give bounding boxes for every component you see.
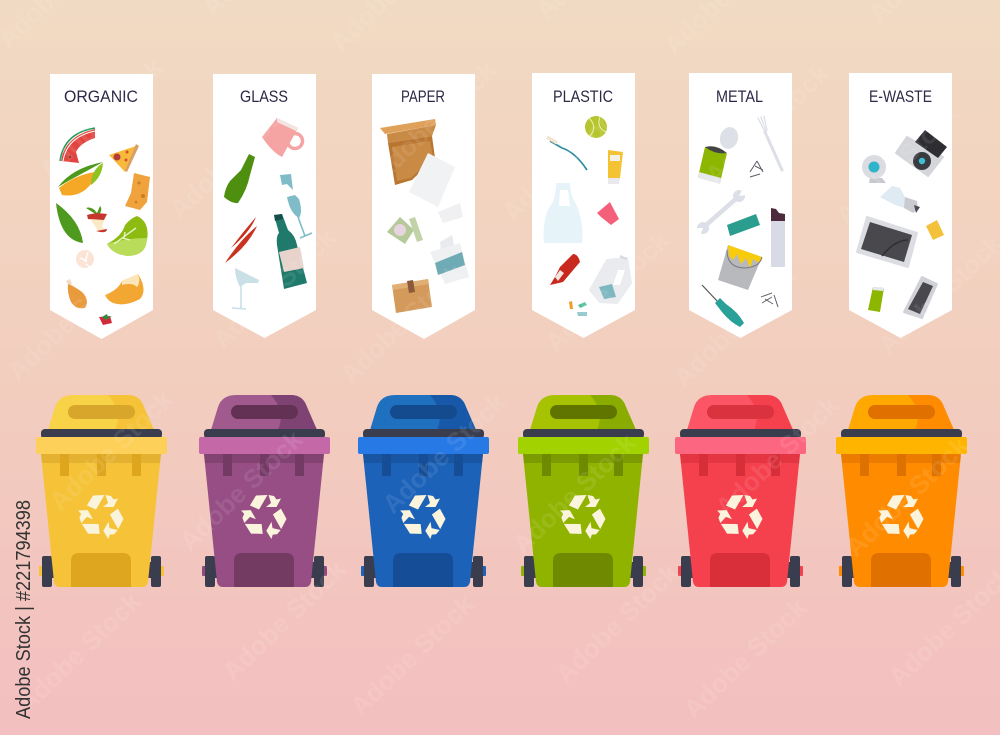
- icon: lettuce: [107, 216, 148, 256]
- icon: plastic bag: [544, 183, 582, 243]
- icon: milk jug: [590, 255, 631, 303]
- bin: e-waste orange: [836, 395, 967, 587]
- bin: paper blue: [358, 395, 489, 587]
- icon: chicken leg: [66, 279, 87, 308]
- icon: steel beam: [727, 214, 760, 236]
- bin: metal red: [675, 395, 806, 587]
- icon: yellow battery: [926, 220, 944, 240]
- icon: wrench: [697, 188, 746, 236]
- panel: e-waste: [849, 73, 952, 338]
- icon: green bottle: [224, 154, 255, 203]
- icon: smartphone: [904, 277, 937, 318]
- icon: egg shell: [76, 250, 94, 268]
- watermarks: Adobe Stock: [1, 254, 137, 386]
- panel: metal: [689, 73, 792, 338]
- icon: cd sleeve: [387, 217, 423, 244]
- icon: parcel: [392, 279, 432, 313]
- panel: plastic: [532, 73, 635, 338]
- watermarks: Adobe Stock: [677, 592, 813, 724]
- icon: green battery: [868, 287, 884, 312]
- icon: tin can: [698, 146, 727, 184]
- icon: open cardboard box: [380, 119, 436, 185]
- panel: glass: [213, 74, 316, 338]
- watermarks: Adobe Stock: [43, 384, 179, 516]
- watermarks: Adobe Stock: [496, 95, 632, 227]
- icon: tennis ball: [585, 116, 607, 138]
- bin: plastic green: [518, 395, 649, 587]
- heading: e-waste: E-WASTE: [869, 87, 932, 106]
- watermarks: Adobe Stock: [206, 222, 342, 354]
- icon: nails: [750, 161, 763, 177]
- icon: fork: [758, 116, 782, 170]
- icon: ketchup bottle: [550, 254, 580, 285]
- icon: tablet: [857, 217, 917, 267]
- watermarks: Adobe Stock: [173, 424, 309, 556]
- icon: watermelon: [60, 128, 95, 163]
- watermarks: Adobe Stock: [11, 586, 147, 718]
- icon: wine bottle: [274, 214, 307, 289]
- icon: screwdriver: [702, 285, 744, 327]
- icon: wine glass: [287, 195, 312, 238]
- icon: milk carton: [430, 235, 469, 284]
- icon: lighter: [771, 208, 785, 267]
- watermarks: Adobe Stock: [539, 225, 675, 357]
- watermarks: Adobe Stock: [334, 257, 470, 389]
- bin: glass purple: [199, 395, 330, 587]
- icon: tube: [608, 150, 623, 184]
- icon: webcam: [862, 155, 886, 183]
- icon: envelope: [438, 203, 463, 223]
- watermarks: Adobe Stock: [344, 589, 480, 721]
- watermarks: Adobe Stock: [366, 55, 502, 187]
- icon: paint bucket: [718, 245, 762, 290]
- icon: red shards: [225, 217, 257, 263]
- panel: paper: [372, 74, 475, 339]
- watermarks: Adobe Stock: [829, 98, 965, 230]
- watermarks: Adobe Stock: [699, 58, 835, 190]
- icon: cup: [597, 202, 619, 225]
- panel: organic: [50, 74, 153, 339]
- icon: nails two: [761, 293, 778, 307]
- icon: paper sheet: [409, 153, 455, 207]
- icon: martini glass: [232, 268, 259, 309]
- watermarks: Adobe Stock: [839, 430, 975, 562]
- heading: glass: GLASS: [240, 87, 288, 106]
- heading: organic: ORGANIC: [64, 87, 138, 106]
- watermarks: Adobe Stock: [163, 92, 299, 224]
- icon: bean leaf: [56, 203, 83, 243]
- stock id caption: Adobe Stock | #221794398: [13, 500, 35, 719]
- icon: apple core: [86, 206, 107, 232]
- watermarks: Adobe Stock: [216, 554, 352, 686]
- heading: paper: PAPER: [401, 87, 445, 106]
- icon: camera: [896, 130, 947, 176]
- icon: can lid: [717, 125, 741, 151]
- icon: corn: [58, 162, 103, 196]
- icon: mug: [262, 118, 302, 157]
- icon: toothbrush: [547, 137, 587, 170]
- heading: metal: METAL: [716, 87, 763, 106]
- watermarks: Adobe Stock: [667, 260, 803, 392]
- icon: glass shard: [280, 174, 293, 190]
- watermarks: Adobe Stock: [376, 387, 512, 519]
- watermarks: Adobe Stock: [709, 390, 845, 522]
- watermarks: Adobe Stock: [506, 427, 642, 559]
- icon: pizza: [109, 144, 139, 172]
- watermarks: Adobe Stock: [33, 52, 169, 184]
- icon: cheese: [125, 173, 150, 210]
- icon: melon slice: [105, 274, 144, 304]
- watermarks: Adobe Stock: [549, 557, 685, 689]
- heading: plastic: PLASTIC: [553, 87, 613, 106]
- icon: plastic pieces: [569, 301, 587, 316]
- icon: energy saving bulb: [880, 186, 920, 213]
- bin: organic yellow: [36, 395, 167, 587]
- icon: strawberry: [99, 314, 112, 325]
